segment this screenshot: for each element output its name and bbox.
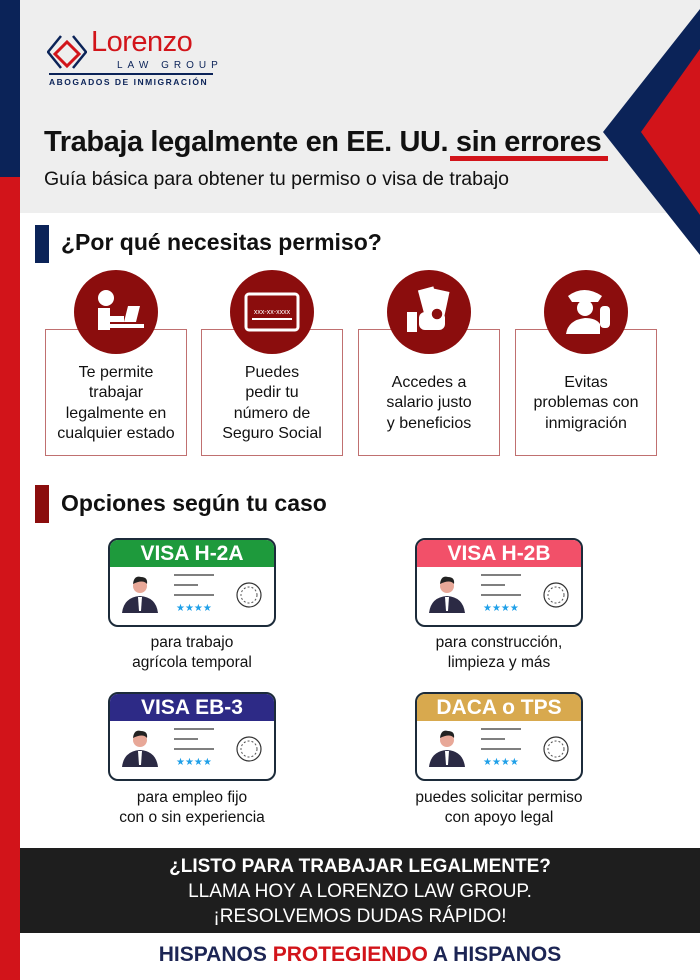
left stripe <box>0 0 20 980</box>
call to action band: LLAMA HOY A LORENZO LAW GROUP. <box>188 881 532 902</box>
card: VISA EB-3: VISA EB-3 <box>141 696 243 719</box>
heading: why: ¿Por qué necesitas permiso? <box>61 229 382 255</box>
caption H-2A: agrícola temporal <box>132 654 252 671</box>
heading: why <box>35 225 382 263</box>
caption DACA: puedes solicitar permiso <box>415 789 583 806</box>
card: VISA H-2A: ★★★★ <box>176 603 212 614</box>
panel: reason 1: cualquier estado <box>57 425 175 442</box>
card: DACA o TPS: ★★★★ <box>483 757 519 768</box>
call to action band: ¡RESOLVEMOS DUDAS RÁPIDO! <box>213 906 507 927</box>
chevron decoration <box>603 9 700 255</box>
caption H-2A: para trabajo <box>151 634 233 651</box>
logo: ABOGADOS DE INMIGRACIÓN <box>49 77 208 87</box>
icon: social security card: xxx-xx-xxxx <box>254 309 291 316</box>
panel: reason 1 <box>45 329 187 456</box>
caption H-2B: limpieza y más <box>448 654 550 671</box>
logo: Lorenzo <box>91 26 192 58</box>
card: VISA H-2B: VISA H-2B <box>447 542 551 565</box>
caption H-2B <box>436 634 562 671</box>
panel: reason 3: y beneficios <box>387 415 471 432</box>
caption H-2A <box>132 634 252 671</box>
card: VISA EB-3 <box>108 692 276 781</box>
logo: LAW GROUP <box>117 60 223 71</box>
card: VISA H-2B: ★★★★ <box>483 603 519 614</box>
card: VISA H-2B <box>415 538 583 627</box>
title underline <box>450 156 608 161</box>
panel: reason 2: pedir tu <box>245 384 299 401</box>
header background <box>0 0 700 213</box>
caption H-2B: para construcción, <box>436 634 562 651</box>
icon: officer stop <box>544 270 628 354</box>
card: DACA o TPS <box>415 692 583 781</box>
panel: reason 2: número de <box>234 404 310 422</box>
heading: options: Opciones según tu caso <box>61 490 327 516</box>
panel: reason 1: legalmente en <box>66 404 166 422</box>
panel: reason 4: problemas con <box>534 394 638 411</box>
logo <box>47 26 223 87</box>
panel: reason 1: trabajar <box>89 384 143 401</box>
panel: reason 4: Evitas <box>564 374 608 391</box>
panel: reason 3 <box>358 329 500 456</box>
panel: reason 2: Puedes <box>245 364 299 380</box>
caption EB-3: para empleo fijo <box>137 789 247 806</box>
card: VISA EB-3: ★★★★ <box>176 757 212 768</box>
icon: logo mark <box>47 35 87 69</box>
call to action band <box>20 848 700 933</box>
panel: reason 2: Seguro Social <box>222 425 322 442</box>
subtitle: Guía básica para obtener tu permiso o visa de trabajo <box>44 168 509 190</box>
panel: reason 3: salario justo <box>386 394 472 411</box>
caption EB-3 <box>119 789 265 826</box>
icon: social security card <box>230 270 314 354</box>
tagline: HISPANOS PROTEGIENDO A HISPANOS <box>159 943 561 966</box>
panel: reason 2 <box>201 329 343 456</box>
caption DACA: con apoyo legal <box>445 809 553 826</box>
card: VISA H-2A: VISA H-2A <box>140 542 244 565</box>
caption EB-3: con o sin experiencia <box>119 809 265 826</box>
title: Trabaja legalmente en EE. UU. sin errores <box>44 126 601 158</box>
panel: reason 1: Te permite <box>79 364 153 380</box>
call to action band: ¿LISTO PARA TRABAJAR LEGALMENTE? <box>169 856 551 877</box>
icon: hand with money <box>387 270 471 354</box>
card: DACA o TPS: DACA o TPS <box>436 696 562 719</box>
panel: reason 4 <box>515 329 657 456</box>
caption DACA <box>415 789 583 826</box>
heading: options <box>35 485 327 523</box>
icon: person with laptop <box>74 270 158 354</box>
panel: reason 3: Accedes a <box>392 374 466 391</box>
card: VISA H-2A <box>108 538 276 627</box>
panel: reason 4: inmigración <box>545 415 627 432</box>
